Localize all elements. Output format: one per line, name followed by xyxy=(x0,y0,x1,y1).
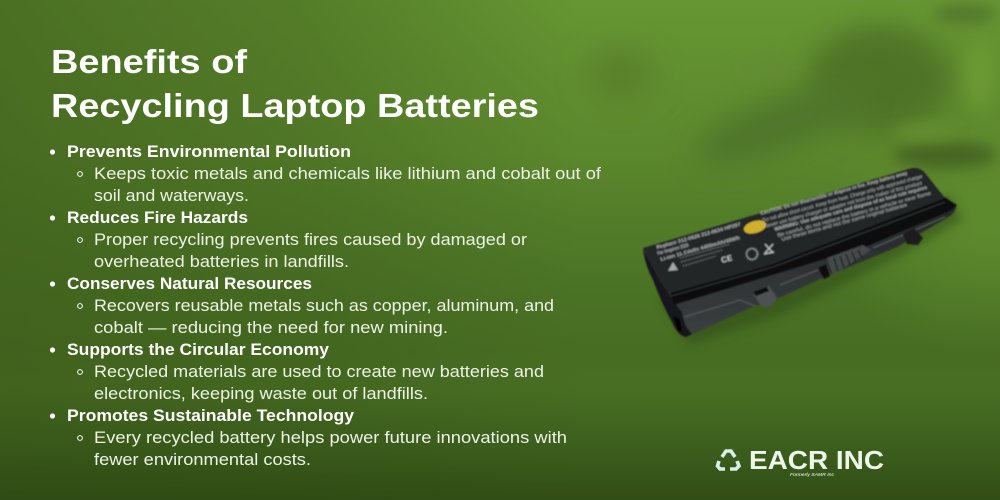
battery label text: WARNING: Use adequate care and dispose of as local rule requires xyxy=(774,185,928,233)
battery left end xyxy=(643,249,692,337)
benefit: conserves natural resources: Recovers reusable metals such as copper, aluminum, and xyxy=(94,297,554,315)
sticker xyxy=(742,218,768,236)
benefit: prevents environmental pollution: Keeps toxic metals and chemicals like lithium and cobalt out of xyxy=(94,165,601,183)
logo: EACR INC xyxy=(718,445,884,477)
benefit: reduces fire hazards: Reduces Fire Hazards xyxy=(67,209,248,227)
benefit: supports the circular economy: Recycled materials are used to create new batteries and xyxy=(94,363,544,381)
title xyxy=(51,43,539,124)
benefit: supports the circular economy: Supports the Circular Economy xyxy=(67,341,330,359)
title: Recycling Laptop Batteries xyxy=(51,87,539,124)
benefit: promotes sustainable technology xyxy=(50,407,567,469)
battery label text: CE xyxy=(720,253,734,265)
battery body xyxy=(643,168,957,337)
benefit: reduces fire hazards xyxy=(50,209,528,271)
battery label text: Do not allow short circuit. Keep from heat. Charge only with approved charger xyxy=(762,174,924,224)
benefit: promotes sustainable technology: fewer environmental costs. xyxy=(94,451,311,469)
battery label text: Replace 312-0626 312-0634 HP297 xyxy=(656,222,741,251)
benefit: supports the circular economy xyxy=(50,341,544,403)
battery top face xyxy=(643,168,945,293)
battery image xyxy=(643,168,962,345)
benefit: prevents environmental pollution xyxy=(50,143,601,205)
battery shadow xyxy=(660,195,962,345)
benefit: reduces fire hazards: overheated batteries in landfills. xyxy=(94,253,349,271)
tiny spec rows xyxy=(680,244,730,266)
battery label text: CAUTION: Do not disassemble or dispose in fire. Keep battery away xyxy=(760,170,908,217)
benefit: prevents environmental pollution: Prevents Environmental Pollution xyxy=(67,143,351,161)
benefit: supports the circular economy: electronics, keeping waste out of landfills. xyxy=(94,385,428,403)
battery clip right xyxy=(903,228,923,245)
benefits list xyxy=(50,143,601,469)
battery gloss lip xyxy=(670,198,957,305)
battery label text: Never use battery charger or adapter not from the maker of this product xyxy=(764,180,923,230)
background foliage shadows xyxy=(586,5,997,180)
benefit: conserves natural resources xyxy=(50,275,554,337)
benefit: conserves natural resources: Conserves Natural Resources xyxy=(67,275,312,293)
battery label text: Li-ion 11.1Volts 4400mAh/48Wh xyxy=(660,235,741,263)
battery label text: Be careful, do not replace the battery in a vehicle or near flame xyxy=(777,191,932,239)
battery label text: Use these items and not the same original batteries xyxy=(781,202,908,243)
battery side wall xyxy=(643,197,956,337)
title: Benefits of xyxy=(51,43,248,80)
benefit: conserves natural resources: cobalt — reducing the need for new mining. xyxy=(94,319,448,337)
battery clip left xyxy=(753,286,777,307)
battery connector xyxy=(818,245,871,279)
benefit: prevents environmental pollution: soil and waterways. xyxy=(94,187,249,205)
benefit: promotes sustainable technology: Promotes Sustainable Technology xyxy=(67,407,355,425)
icon: recycling symbol xyxy=(718,451,739,469)
benefit: reduces fire hazards: Proper recycling prevents fires caused by damaged or xyxy=(94,231,528,249)
battery label text xyxy=(656,170,932,266)
battery label text: For Inspiron 1525 xyxy=(657,243,689,257)
battery side ledges xyxy=(684,217,945,317)
benefit: promotes sustainable technology: Every recycled battery helps power future innovations with xyxy=(94,429,567,447)
logo wordmark: EACR INC xyxy=(749,445,884,475)
logo tagline: Formerly SAMR Inc xyxy=(790,472,835,477)
